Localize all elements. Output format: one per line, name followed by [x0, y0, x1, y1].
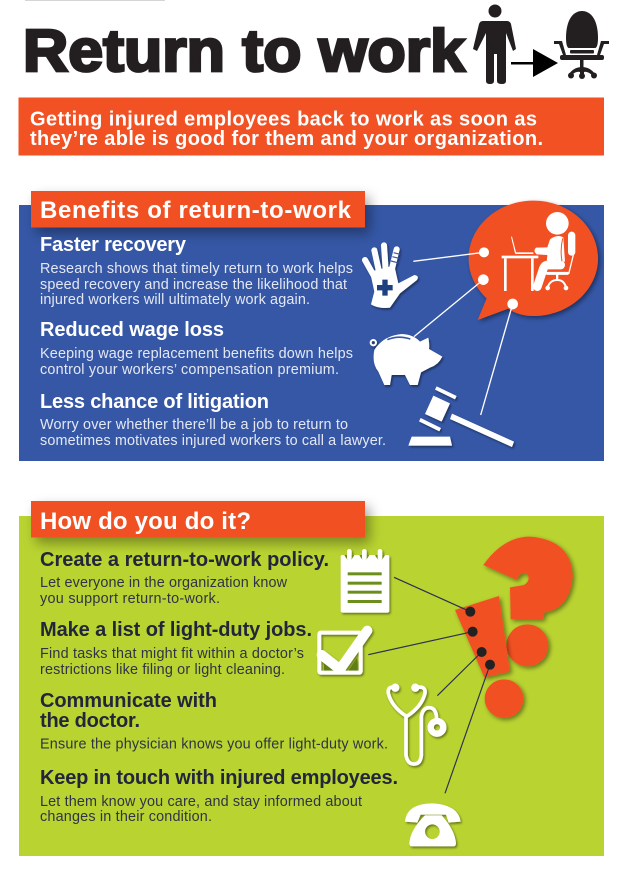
- icon: office chair: [554, 11, 609, 79]
- heading: benefits: [31, 191, 365, 228]
- text block: keep in touch: changes in their condition.: [40, 809, 212, 825]
- text block: faster recovery: Faster recovery: [40, 234, 187, 256]
- text block: keep in touch: Keep in touch with injured employees.: [40, 767, 398, 789]
- text block: light-duty jobs: [40, 619, 312, 678]
- text block: reduced wage loss: control your workers’ compensation premium.: [40, 362, 339, 378]
- heading: how do you do it: [31, 501, 365, 538]
- heading: benefits: Benefits of return-to-work: [40, 197, 352, 224]
- intro banner: [18, 98, 604, 156]
- text block: light-duty jobs: restrictions like filing or light cleaning.: [40, 662, 285, 678]
- text block: less chance of litigation: [40, 391, 386, 449]
- text block: communicate with the doctor: [40, 690, 388, 752]
- icon: notepad: [341, 551, 389, 613]
- icon: gavel: [408, 386, 514, 447]
- text block: light-duty jobs: Find tasks that might fit within a doctor’s: [40, 646, 304, 662]
- connector lines and dots: [368, 577, 495, 793]
- text block: communicate with the doctor: Communicate with: [40, 690, 217, 712]
- text block: less chance of litigation: Worry over whether there’ll be a job to return to: [40, 417, 348, 433]
- text block: communicate with the doctor: the doctor.: [40, 710, 140, 732]
- text block: reduced wage loss: Keeping wage replacement benefits down helps: [40, 346, 353, 362]
- heading: how do you do it: How do you do it?: [40, 508, 251, 535]
- icon: person to chair: [473, 4, 609, 84]
- icon: telephone: [405, 803, 461, 846]
- icon: person: [473, 4, 516, 84]
- benefits illustration: [365, 201, 598, 447]
- cropped text strip at page top: [25, 0, 165, 1]
- how-to illustration: [319, 537, 573, 846]
- title: Return to work: [23, 17, 466, 84]
- text block: create a policy: Create a return-to-work policy.: [40, 549, 329, 571]
- question mark: [483, 537, 573, 666]
- icon: hand with cross: [365, 245, 418, 308]
- text block: reduced wage loss: Reduced wage loss: [40, 319, 224, 341]
- text block: faster recovery: speed recovery and increase the likelihood that: [40, 277, 347, 293]
- text block: light-duty jobs: Make a list of light-duty jobs.: [40, 619, 312, 641]
- connector lines and dots: [413, 247, 518, 415]
- text block: faster recovery: injured workers will ultimately work again.: [40, 292, 310, 308]
- icon: question mark with exclamation: [455, 537, 573, 718]
- intro banner: they’re able is good for them and your organization.: [30, 128, 543, 150]
- arrow: [511, 49, 558, 77]
- text block: faster recovery: [40, 234, 353, 308]
- text block: less chance of litigation: Less chance of litigation: [40, 391, 269, 413]
- text block: communicate with the doctor: Ensure the physician knows you offer light-duty work.: [40, 736, 388, 752]
- text block: keep in touch: Let them know you care, and stay informed about: [40, 794, 362, 810]
- text block: less chance of litigation: sometimes motivates injured workers to call a lawyer.: [40, 433, 386, 449]
- text block: faster recovery: Research shows that timely return to work helps: [40, 261, 353, 277]
- icon: stethoscope: [388, 685, 443, 764]
- icon: checkbox: [319, 631, 367, 673]
- panel: benefits of return-to-work: [19, 191, 604, 461]
- panel: how do you do it: [19, 501, 604, 856]
- speech bubble with seated worker: [469, 201, 598, 320]
- text block: create a policy: Let everyone in the organization know: [40, 575, 288, 591]
- intro banner: Getting injured employees back to work as soon as: [30, 108, 537, 130]
- text block: keep in touch: [40, 767, 398, 825]
- text block: create a policy: [40, 549, 329, 607]
- icon: piggy bank: [371, 334, 442, 385]
- text block: reduced wage loss: [40, 319, 353, 378]
- text block: create a policy: you support return-to-work.: [40, 591, 220, 607]
- exclamation mark: [455, 596, 523, 718]
